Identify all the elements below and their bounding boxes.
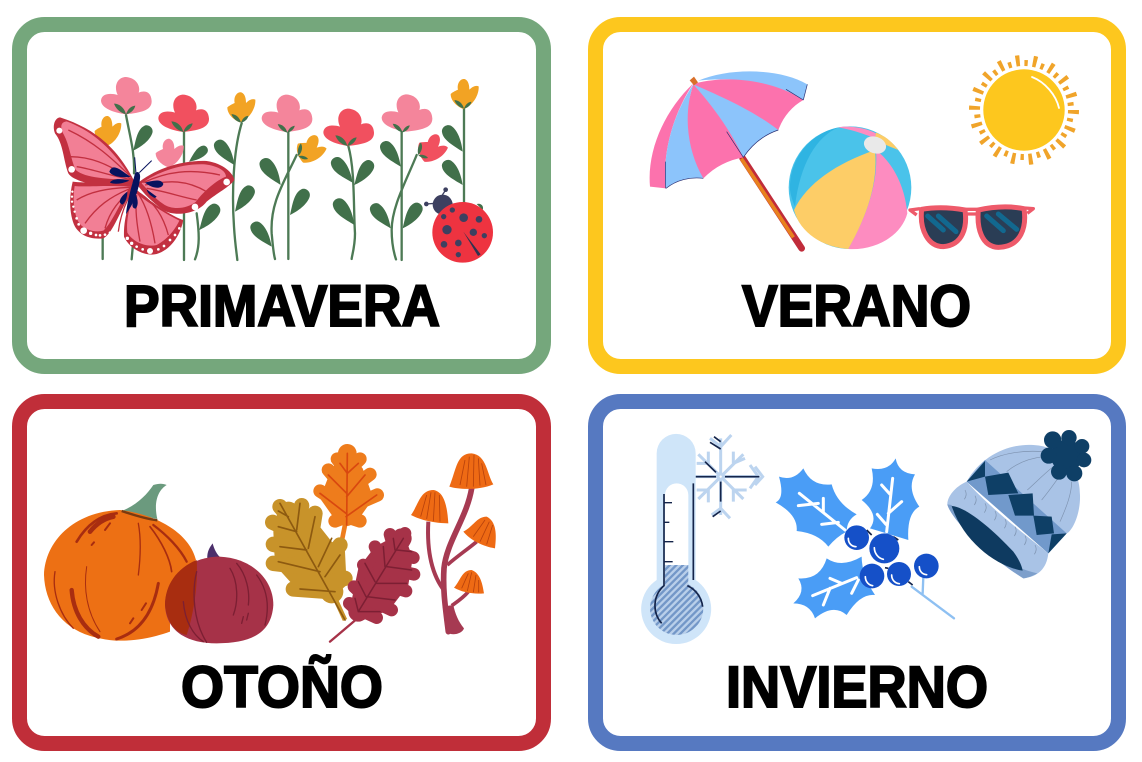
hat pompom [1041, 430, 1091, 481]
butterfly white dots [56, 128, 230, 254]
icon: maroon leaf [330, 532, 414, 642]
panel: invierno [596, 402, 1118, 744]
icon: sun [974, 60, 1074, 160]
card border: verano [596, 24, 1118, 366]
heading: invierno: INVIERNO [726, 655, 988, 720]
icon: snowflake [696, 435, 763, 518]
icon: thermometer [641, 434, 711, 644]
panel: verano [596, 24, 1118, 366]
card border: primavera [20, 24, 544, 366]
butterfly veins [68, 130, 220, 243]
icon: beach umbrella [650, 71, 807, 248]
icon: orange leaf [320, 450, 377, 542]
icon: butterfly [54, 117, 234, 255]
heading: verano: VERANO [742, 274, 971, 339]
icon: small pumpkin [165, 543, 273, 643]
heading: otoño: OTOÑO [181, 654, 383, 720]
icon: ladybug [424, 187, 493, 263]
illustration: beach umbrella, ball, sunglasses [650, 71, 1033, 249]
icon: sunglasses [910, 207, 1033, 247]
icon: winter hat [947, 430, 1091, 578]
illustration: thermometer, snowflake, holly, hat [641, 430, 1091, 644]
icon: big pumpkin [44, 484, 196, 641]
flower stems [103, 108, 464, 260]
heading: primavera: PRIMAVERA [124, 274, 440, 339]
icon: holly [776, 458, 954, 618]
icon: mushrooms [411, 453, 496, 634]
icon: beach ball [789, 126, 911, 249]
card border: invierno [596, 402, 1118, 744]
illustration: spring flowers, butterfly and ladybug [54, 77, 493, 263]
leaves [128, 122, 468, 251]
butterfly body [109, 157, 163, 214]
flowers [95, 77, 479, 169]
card border: otoño [20, 402, 544, 744]
panel: otoño [20, 402, 544, 744]
icon: gold leaf [273, 502, 347, 620]
illustration: pumpkins, leaves, mushrooms [44, 450, 496, 643]
panel: primavera [20, 24, 544, 366]
